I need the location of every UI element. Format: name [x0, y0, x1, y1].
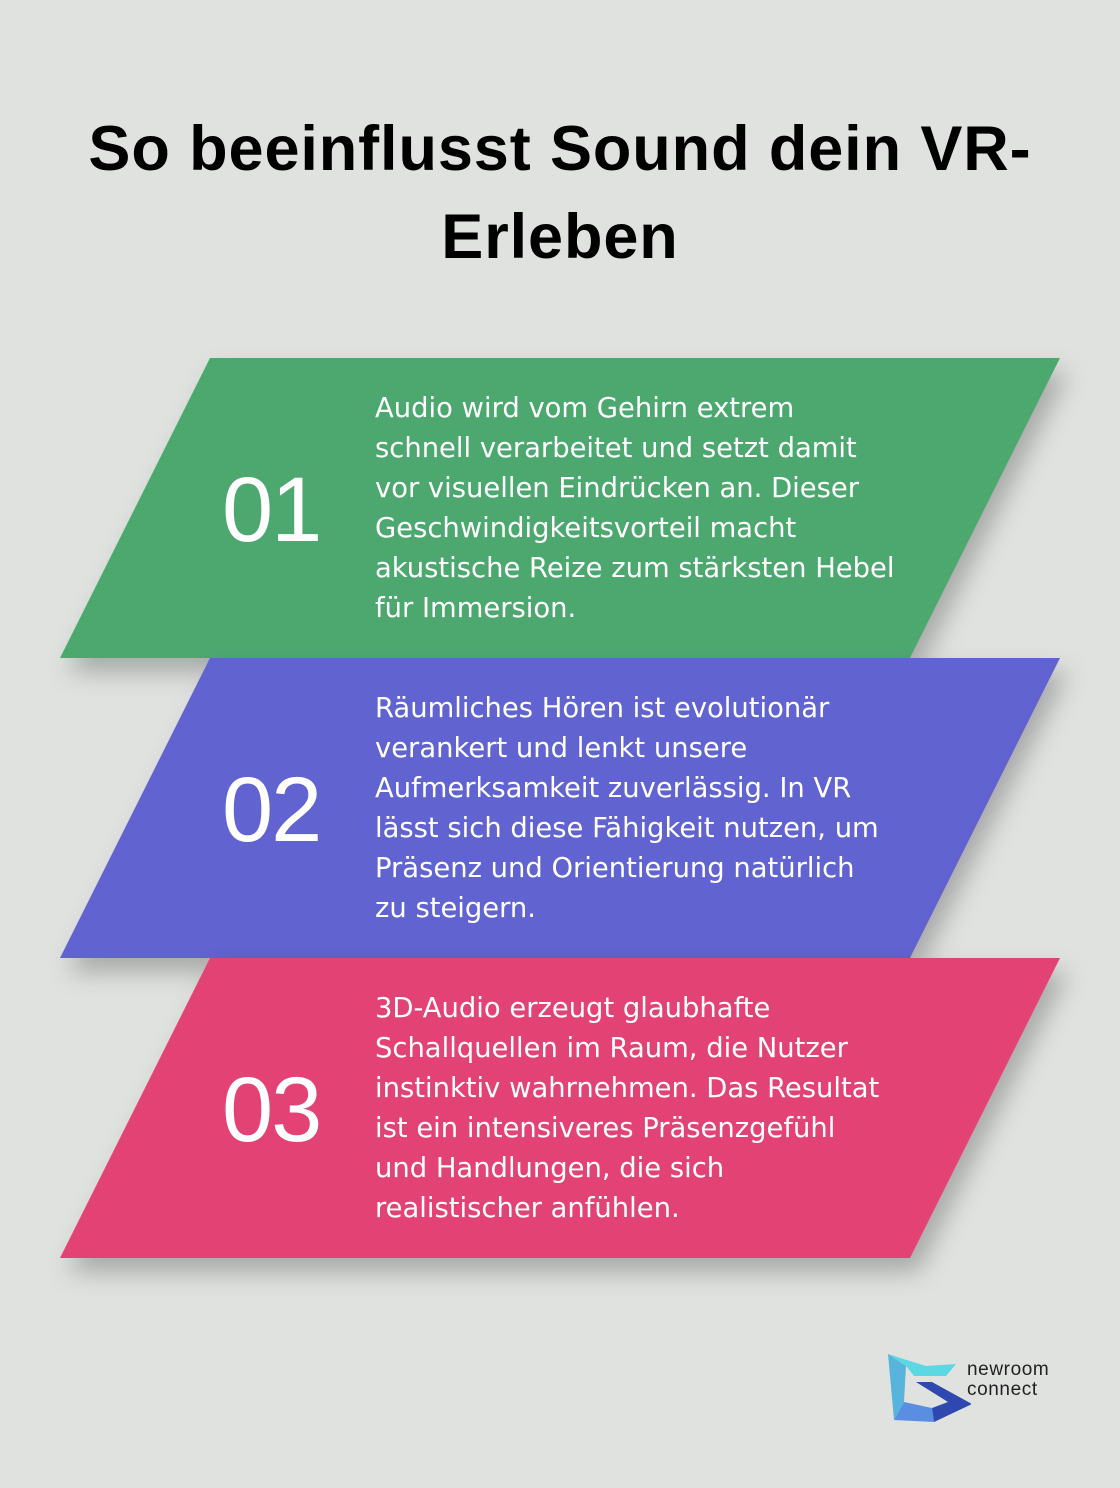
text 1: Geschwindigkeitsvorteil macht — [375, 513, 796, 544]
text 2 — [375, 693, 879, 924]
text 3: Schallquellen im Raum, die Nutzer — [375, 1033, 848, 1064]
number 03: 03 — [222, 1059, 320, 1161]
text 2: Aufmerksamkeit zuverlässig. In VR — [375, 773, 851, 804]
text 1: akustische Reize zum stärksten Hebel — [375, 553, 894, 584]
text 3: realistischer anfühlen. — [375, 1193, 680, 1224]
title: So beeinflusst Sound dein VR- — [88, 114, 1032, 184]
text 2: Präsenz und Orientierung natürlich — [375, 853, 855, 884]
title: Erleben — [441, 202, 679, 272]
number 02: 02 — [222, 759, 320, 861]
panel 2 shape — [60, 658, 1060, 958]
text 3 — [375, 993, 879, 1224]
text 1: vor visuellen Eindrücken an. Dieser — [375, 473, 859, 504]
text 2: lässt sich diese Fähigkeit nutzen, um — [375, 813, 879, 844]
title — [88, 114, 1032, 272]
panel 3 shape — [60, 958, 1060, 1258]
text 3: und Handlungen, die sich — [375, 1153, 724, 1184]
text 3: 3D-Audio erzeugt glaubhafte — [375, 993, 770, 1024]
icon: logo mark — [888, 1354, 971, 1422]
number 01: 01 — [222, 459, 320, 561]
text 2: zu steigern. — [375, 893, 536, 924]
text 2: Räumliches Hören ist evolutionär — [375, 693, 829, 724]
text 1: Audio wird vom Gehirn extrem — [375, 393, 794, 424]
logo — [888, 1354, 1049, 1422]
text 1 — [375, 393, 894, 624]
text 3: ist ein intensiveres Präsenzgefühl — [375, 1113, 835, 1144]
text 2: verankert und lenkt unsere — [375, 733, 747, 764]
logo text: connect — [967, 1379, 1038, 1400]
text 3: instinktiv wahrnehmen. Das Resultat — [375, 1073, 879, 1104]
logo text — [967, 1359, 1049, 1400]
text 1: für Immersion. — [375, 593, 576, 624]
text 1: schnell verarbeitet und setzt damit — [375, 433, 857, 464]
panel 1 shape — [60, 358, 1060, 658]
logo text: newroom — [967, 1359, 1049, 1380]
